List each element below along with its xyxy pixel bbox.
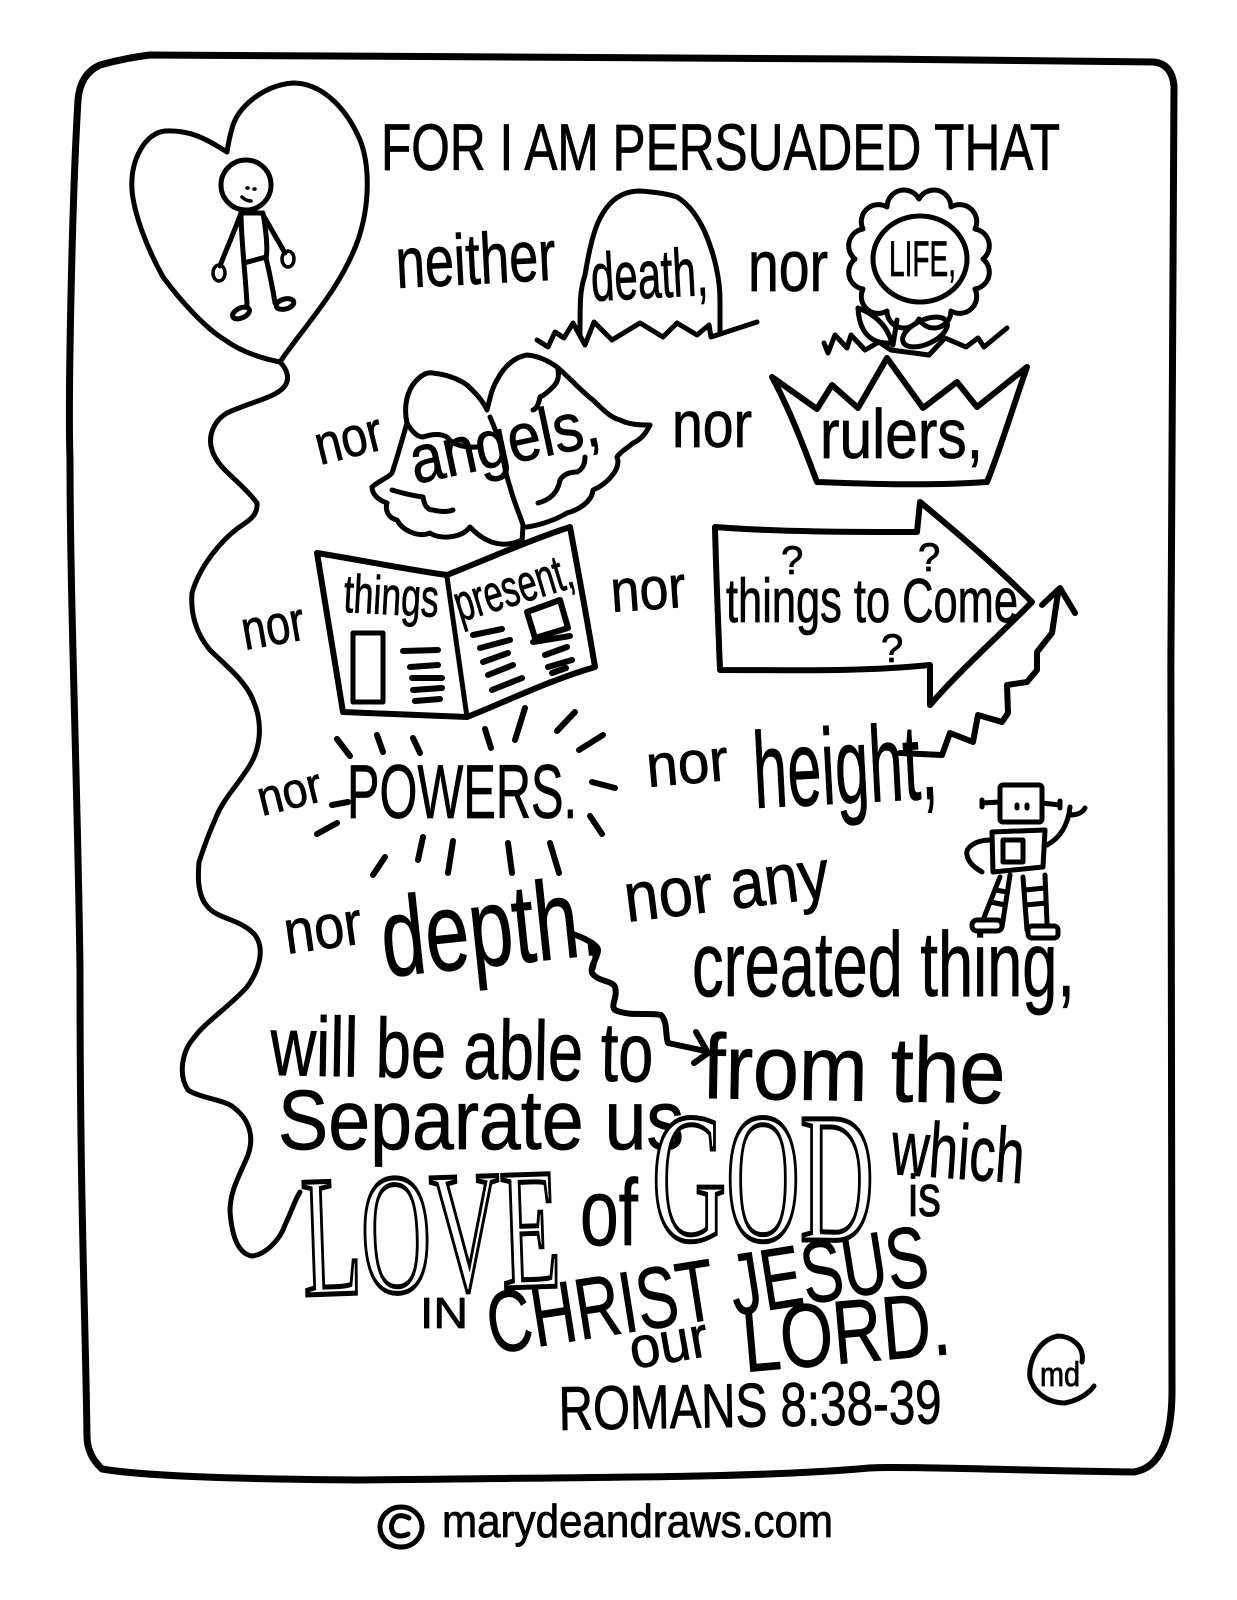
- text: depth: depth,: [374, 854, 606, 1001]
- text: LORD: LORD.: [738, 1274, 954, 1392]
- text: nor after angels: nor: [672, 387, 752, 461]
- text: Separate us: Separate us: [278, 1073, 684, 1167]
- icon: angel wings: [372, 355, 650, 544]
- icon: arrow: [715, 502, 1032, 705]
- text: things: things: [342, 564, 440, 629]
- question marks: ?: [918, 536, 940, 580]
- arrow: zigzag rising: [900, 588, 1075, 755]
- text: which is: is: [908, 1164, 941, 1229]
- text: neither: neither: [394, 216, 558, 304]
- question marks: ?: [781, 539, 803, 583]
- text: LOVE: LOVE: [299, 1134, 563, 1333]
- text: rulers: rulers,: [820, 395, 983, 473]
- text: angels: angels,: [402, 384, 606, 499]
- text: scripture reference: ROMANS 8:38-39: [558, 1368, 942, 1444]
- text: from the: from the: [702, 1016, 1006, 1123]
- question marks: ?: [881, 627, 903, 671]
- text: nor before things present: nor: [236, 589, 309, 662]
- text: will be able to: will be able to: [269, 999, 654, 1100]
- text: our: our: [624, 1304, 713, 1382]
- icon: flower: [824, 190, 1007, 355]
- icon: artist signature: [1030, 1336, 1094, 1403]
- icon: robot: [967, 785, 1085, 938]
- text: death: death,: [589, 234, 710, 316]
- icon: open newspaper: [317, 527, 595, 717]
- balloon string: [182, 362, 300, 1256]
- icon: power rays: [317, 708, 615, 875]
- footer: website credit: marydeandraws.com: [442, 1495, 833, 1547]
- icon: crown: [772, 358, 1027, 484]
- page border: [69, 55, 1174, 1480]
- text: nor before powers: nor: [251, 757, 328, 827]
- text: IN: IN: [420, 1289, 468, 1338]
- icon: tombstone: [537, 191, 757, 347]
- text: nor before angels: nor: [308, 399, 389, 477]
- text: which is: [888, 1103, 1028, 1229]
- text: CHRIST JESUS: CHRIST JESUS: [480, 1207, 934, 1373]
- text: created thing: created thing,: [692, 914, 1075, 1016]
- text: of: of: [580, 1160, 638, 1266]
- arrow: squiggle down: [570, 933, 708, 1063]
- text: which is: which: [888, 1103, 1028, 1200]
- text: things to come: things to Come: [726, 567, 1018, 636]
- text: nor after death: nor: [748, 227, 828, 307]
- text: POWERS: POWERS.: [347, 750, 577, 835]
- icon: artist signature: md: [1040, 1356, 1080, 1394]
- text: GOD: GOD: [652, 1076, 874, 1281]
- text: present: present,: [447, 542, 580, 633]
- question marks: [781, 536, 940, 671]
- text: nor after present: nor: [608, 553, 688, 625]
- text: nor before height: nor: [643, 726, 731, 800]
- text: LIFE: LIFE,: [889, 231, 956, 287]
- icon: heart with stick figure: [132, 83, 367, 362]
- text: height: height,: [750, 701, 940, 831]
- text: nor before depth: nor: [279, 889, 366, 968]
- text: nor any: nor any: [619, 834, 833, 937]
